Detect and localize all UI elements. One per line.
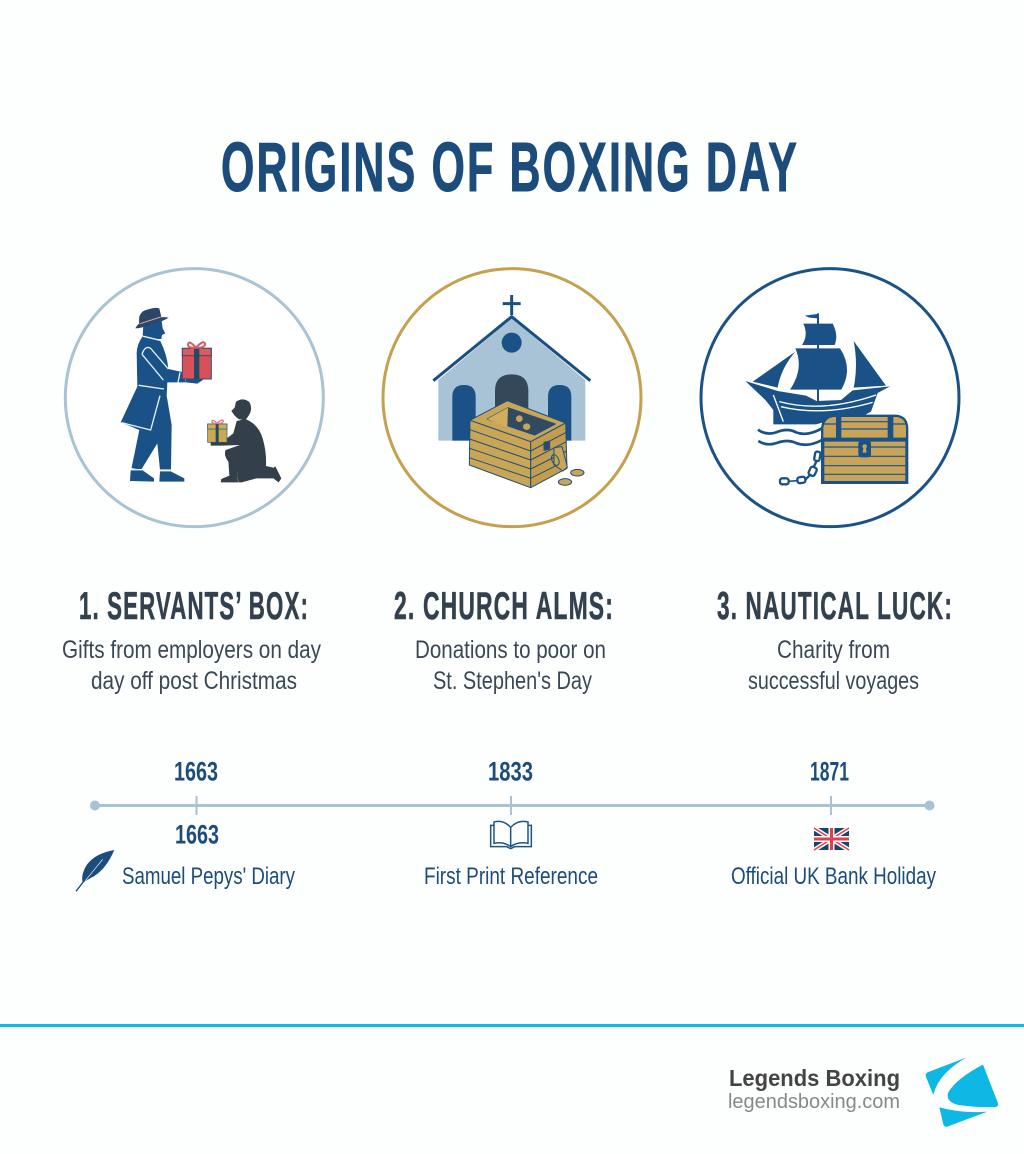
year: 1833: 1833: [488, 756, 533, 786]
icon: quill: [76, 850, 114, 891]
icon: church: [433, 295, 590, 441]
panel: nautical luck icon: [701, 269, 959, 527]
icon: treasure chest: [821, 415, 908, 484]
heading: church alms: 2. CHURCH ALMS:: [394, 585, 614, 628]
text block: church alms description: [415, 636, 606, 695]
text block: servants' box description: [62, 636, 321, 695]
year: 1663: 1663: [174, 756, 218, 786]
icon: kneeling figure: [211, 399, 281, 482]
text block: nautical luck description: Charity from: [777, 636, 890, 664]
text block: servants' box description: Gifts from employers on day: [62, 636, 321, 664]
icon: gold gift: [208, 420, 227, 442]
circle ring: [65, 269, 323, 527]
circle ring: [383, 269, 641, 527]
text block: nautical luck description: successful voyages: [748, 667, 919, 695]
panel: servants' box icon: [65, 269, 323, 527]
year below line: 1663: 1663: [175, 820, 219, 850]
footer website: legendsboxing.com: [728, 1091, 900, 1113]
text block: servants' box description: day off post Christmas: [91, 667, 297, 695]
timeline: [76, 756, 936, 891]
footer rule: [0, 1024, 1024, 1027]
label: Official UK Bank Holiday: Official UK Bank Holiday: [731, 863, 936, 890]
icon: UK flag: [814, 828, 849, 850]
icon: red gift: [182, 342, 211, 379]
panel: church alms icon: [383, 269, 641, 527]
text block: nautical luck description: [748, 636, 919, 695]
label: First Print Reference: First Print Reference: [424, 863, 598, 890]
icon: open book: [491, 821, 531, 849]
icon: alms crate: [469, 401, 584, 488]
logo: [926, 1057, 998, 1127]
icon: employer figure: [121, 308, 203, 482]
icon: ship: [745, 313, 890, 424]
year: 1871: 1871: [810, 756, 849, 786]
label: Samuel Pepys' Diary: Samuel Pepys' Diary: [122, 863, 295, 890]
circle ring: [701, 269, 959, 527]
icon: chain: [780, 451, 821, 484]
text block: church alms description: St. Stephen's Day: [433, 667, 592, 695]
footer brand name: Legends Boxing: [729, 1065, 900, 1091]
text block: church alms description: Donations to poor on: [415, 636, 606, 664]
icon: waves: [758, 428, 822, 445]
heading: servants' box: 1. SERVANTS’ BOX:: [79, 585, 309, 628]
